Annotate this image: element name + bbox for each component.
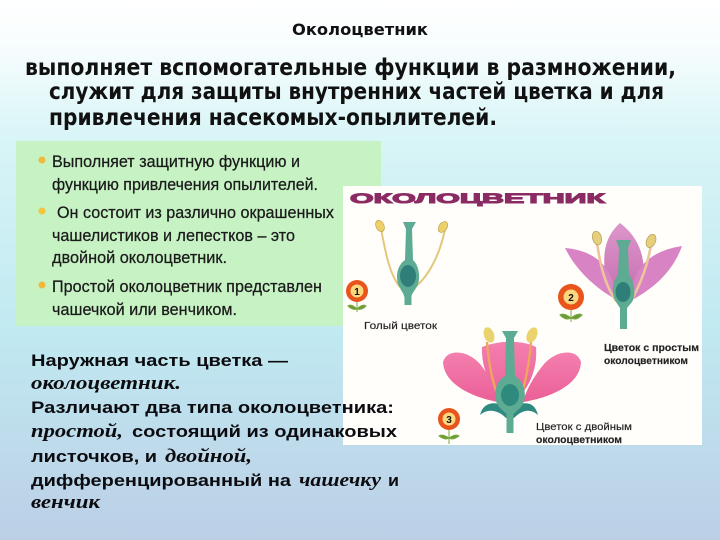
badge 1: 1 <box>354 287 360 298</box>
panel: flower diagrams <box>343 186 702 446</box>
bullet text: Выполняет защитную функцию и <box>52 152 300 171</box>
caption: double perianth <box>536 422 632 446</box>
lower text block: состоящий из одинаковых <box>132 422 398 441</box>
bullet 2 <box>38 208 46 214</box>
badge 2 <box>558 284 584 322</box>
lower text block: двойной, <box>165 446 252 467</box>
flower 2: simple perianth <box>565 223 682 329</box>
bullet 3 <box>38 282 46 288</box>
caption: naked flower: Голый цветок <box>364 321 438 332</box>
lower text block <box>31 351 399 513</box>
lower text block: Различают два типа околоцветника: <box>31 398 394 417</box>
caption: double perianth: околоцветником <box>536 435 622 446</box>
bullet text: чашечкой или венчиком. <box>52 300 237 319</box>
caption: double perianth: Цветок с двойным <box>536 422 632 433</box>
caption: simple perianth: околоцветником <box>604 356 688 367</box>
bullet text: функцию привлечения опылителей. <box>52 175 318 194</box>
badge 2: 2 <box>568 293 574 304</box>
lower text block: чашечку <box>299 470 382 491</box>
flower 3: double perianth <box>443 326 581 433</box>
caption: simple perianth <box>604 343 699 367</box>
lower text block: и <box>388 471 399 490</box>
flower 1: naked <box>374 219 450 305</box>
lower text block: простой, <box>31 421 123 442</box>
badge 3 <box>438 408 460 444</box>
title: Околоцветник <box>292 20 428 39</box>
lower text block: венчик <box>31 492 102 513</box>
bullet 1 <box>38 156 46 164</box>
caption: simple perianth: Цветок с простым <box>604 343 699 354</box>
badge 1 <box>346 280 368 312</box>
intro text block <box>25 55 676 131</box>
lower text block: Наружная часть цветка — <box>31 351 288 370</box>
panel: green bullet list <box>16 141 381 326</box>
bullet text: чашелистиков и лепестков – это <box>52 226 295 245</box>
bullet text: Простой околоцветник представлен <box>52 277 322 296</box>
bullet text <box>52 152 334 319</box>
lower text block: листочков, и <box>31 447 157 466</box>
intro text block: привлечения насекомых-опылителей. <box>49 105 497 131</box>
badge 3: 3 <box>446 415 452 426</box>
bullet text: Он состоит из различно окрашенных <box>57 203 334 222</box>
lower text block: дифференцированный на <box>31 471 292 490</box>
bullet text: двойной околоцветник. <box>52 248 227 267</box>
lower text block: околоцветник. <box>31 373 181 394</box>
diagram heading: ОКОЛОЦВЕТНИК <box>350 190 606 206</box>
